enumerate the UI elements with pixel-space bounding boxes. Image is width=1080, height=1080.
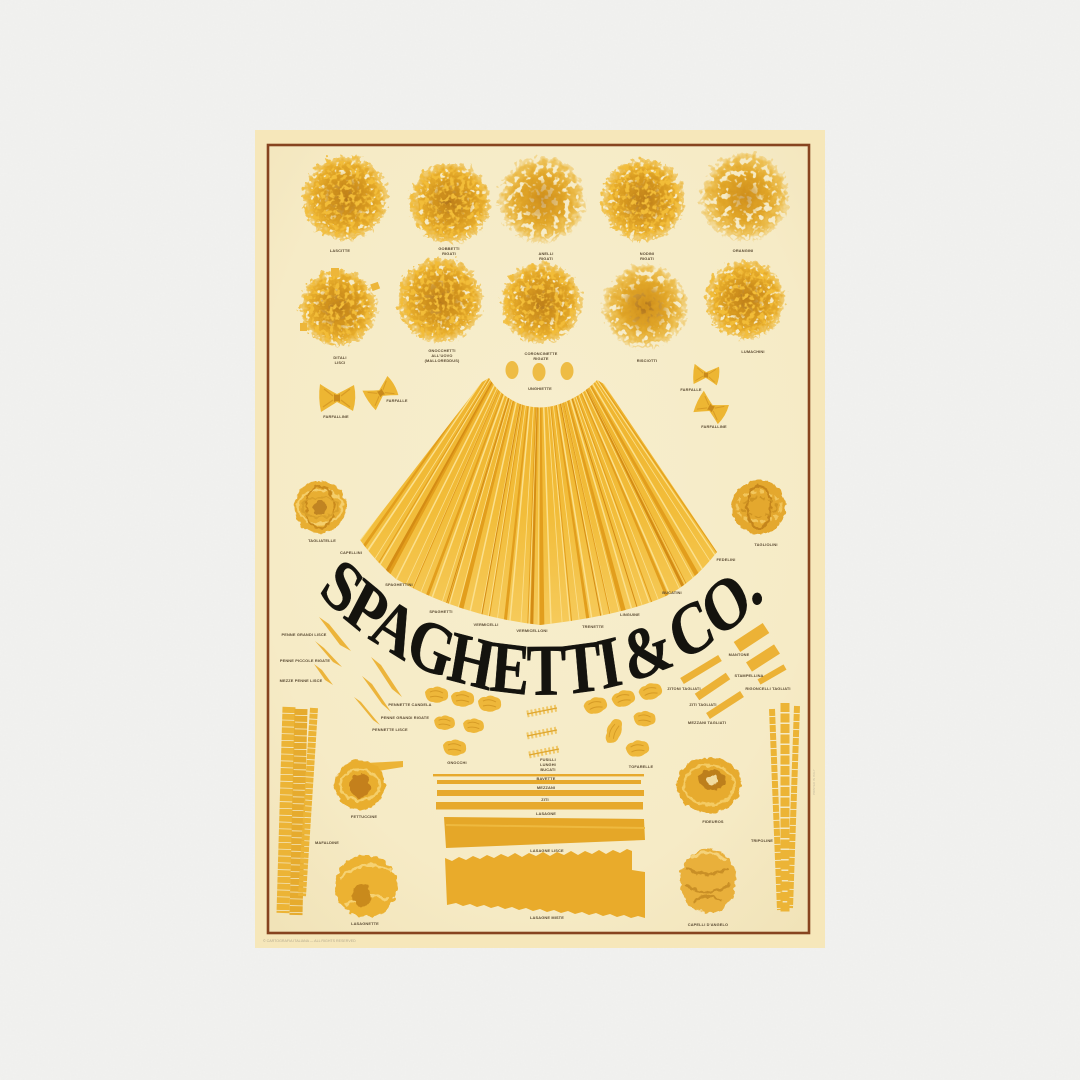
pile labels: ANELLI bbox=[539, 251, 553, 256]
penne left bbox=[280, 617, 432, 732]
nest: tagliatelle bbox=[294, 481, 346, 533]
macaroni right: STAMPELLINA bbox=[734, 673, 764, 678]
pile: anelli rigati bbox=[499, 157, 585, 243]
spaghetti labels bbox=[340, 550, 735, 633]
pile labels: LISCI bbox=[335, 360, 345, 365]
macaroni right: ZITONI TAGLIATI bbox=[667, 686, 701, 691]
spaghetti labels: SPAGHETTINI bbox=[385, 582, 413, 587]
penne left: MEZZE PENNE LISCE bbox=[280, 678, 323, 683]
bow pasta left: FARFALLINE bbox=[323, 414, 349, 419]
spaghetti labels: FEDELINI bbox=[717, 557, 735, 562]
bow pasta right bbox=[680, 364, 730, 429]
pile labels: GNOCCHETTI bbox=[428, 348, 456, 353]
nest: tagliolini bbox=[732, 480, 786, 534]
shells right: tofarelle: TOFARELLE bbox=[629, 764, 653, 769]
nest: fideuros bbox=[677, 757, 741, 824]
long strip pasta: LASAGNE bbox=[536, 811, 556, 816]
pile: gnocchetti all'uovo bbox=[398, 258, 482, 342]
pile labels: RIGATI bbox=[442, 251, 456, 256]
long strip pasta: ZITI bbox=[541, 797, 549, 802]
penne left: PENNE GRANDI RIGATE bbox=[381, 715, 429, 720]
long strip pasta bbox=[433, 774, 644, 816]
pile: ditali lisci bbox=[300, 268, 380, 346]
shells: unghiette: UNGHIETTE bbox=[528, 386, 552, 391]
pile: gobbetti rigati bbox=[410, 163, 490, 243]
bow pasta left: FARFALLE bbox=[386, 398, 408, 403]
spaghetti labels: VERMICELLONI bbox=[516, 628, 548, 633]
spaghetti labels: TRENETTE bbox=[582, 624, 604, 629]
shells left: gnocchi bbox=[425, 686, 501, 765]
row 1 pasta piles bbox=[303, 153, 789, 243]
lasagne ricce bbox=[445, 849, 645, 920]
pile labels: LUMACHINI bbox=[741, 349, 765, 354]
nest: lasagnette bbox=[335, 855, 397, 926]
poster sheet bbox=[255, 130, 825, 948]
pile labels: GOBBETTI bbox=[438, 246, 460, 251]
macaroni right: RIGONCELLI TAGLIATI bbox=[745, 686, 791, 691]
spaghetti labels: VERMICELLI bbox=[473, 622, 499, 627]
lasagne ricce: LASAGNE MISTE bbox=[530, 915, 564, 920]
nest: fideuros: FIDEUROS bbox=[702, 819, 724, 824]
long ribbons left: MAFALDINE bbox=[315, 840, 339, 845]
pile labels: ALL'UOVO bbox=[431, 353, 453, 358]
vertical margin note: PRINTED IN ITALY bbox=[812, 769, 816, 795]
spaghetti labels: BUCATINI bbox=[662, 590, 682, 595]
long ribbons right bbox=[751, 703, 797, 912]
copyright line: © CARTOGRAFIA ITALIANA — ALL RIGHTS RESERVED bbox=[263, 939, 356, 943]
long ribbons right: TRIPOLINE bbox=[751, 838, 773, 843]
pile: nodini rigati bbox=[602, 159, 684, 241]
pile: orangini bbox=[701, 153, 789, 241]
title: SPAGHETTI & CO. bbox=[320, 562, 762, 695]
long ribbons left bbox=[283, 707, 339, 915]
poster inner panel with brown border bbox=[268, 145, 809, 933]
fusilli centre: FUSILLI bbox=[540, 757, 556, 762]
nest: capelli d'angelo: CAPELLI D'ANGELO bbox=[688, 922, 728, 927]
penne left: PENNETTE CANDELA bbox=[388, 702, 432, 707]
nest: lasagnette: LASAGNETTE bbox=[351, 921, 379, 926]
pile labels: DITALI bbox=[333, 355, 347, 360]
shells right: tofarelle bbox=[582, 681, 664, 769]
pile labels: ORANGINI bbox=[733, 248, 753, 253]
pile: lascitte bbox=[303, 156, 387, 240]
pile labels: RIGATI bbox=[539, 256, 553, 261]
spaghetti labels: LINGUINE bbox=[620, 612, 640, 617]
nest: capelli d'angelo bbox=[680, 849, 736, 927]
lasagne lisce bbox=[444, 817, 645, 853]
label: tagliatelle: TAGLIATELLE bbox=[308, 538, 336, 543]
macaroni right: MANTONE bbox=[729, 652, 750, 657]
bow pasta left bbox=[319, 375, 408, 419]
fusilli centre: LUNGHI bbox=[540, 762, 556, 767]
spaghetti fan bbox=[360, 378, 717, 625]
pile labels bbox=[330, 246, 765, 365]
penne left: PENNE GRANDI LISCE bbox=[281, 632, 327, 637]
macaroni right: MEZZANI TAGLIATI bbox=[688, 720, 726, 725]
shells: unghiette bbox=[506, 361, 574, 391]
macaroni right bbox=[667, 628, 791, 725]
row 2 pasta piles bbox=[300, 258, 784, 349]
pile: lumachini bbox=[706, 261, 784, 339]
fusilli centre bbox=[527, 708, 559, 772]
pile labels: LASCITTE bbox=[330, 248, 350, 253]
pile labels: CORONCINETTE bbox=[525, 351, 558, 356]
bow pasta right: FARFALLINE bbox=[701, 424, 727, 429]
penne left: PENNETTE LISCE bbox=[372, 727, 408, 732]
shells left: gnocchi: GNOCCHI bbox=[447, 760, 467, 765]
pile labels: RIGATI bbox=[640, 256, 654, 261]
penne left: PENNE PICCOLE RIGATE bbox=[280, 658, 330, 663]
spaghetti labels: CAPELLINI bbox=[340, 550, 362, 555]
long strip pasta: MEZZANI bbox=[537, 785, 555, 790]
fusilli centre: BUCATI bbox=[540, 767, 556, 772]
nest: fettuccine bbox=[335, 760, 403, 819]
nest: fettuccine: FETTUCCINE bbox=[351, 814, 377, 819]
pile: risciotti bbox=[603, 265, 687, 349]
label: tagliolini: TAGLIOLINI bbox=[754, 542, 778, 547]
pile labels: RIGATE bbox=[533, 356, 549, 361]
lasagne lisce: LASAGNE LISCE bbox=[530, 848, 564, 853]
bow pasta right: FARFALLE bbox=[680, 387, 702, 392]
pile: coroncinette rigate bbox=[501, 263, 581, 343]
macaroni right: ZITI TAGLIATI bbox=[689, 702, 717, 707]
long strip pasta: BAVETTE bbox=[537, 776, 556, 781]
spaghetti labels: SPAGHETTI bbox=[429, 609, 453, 614]
pile labels: NODINI bbox=[640, 251, 654, 256]
pile labels: RISCIOTTI bbox=[637, 358, 657, 363]
pile labels: (MALLOREDDUS) bbox=[425, 358, 460, 363]
